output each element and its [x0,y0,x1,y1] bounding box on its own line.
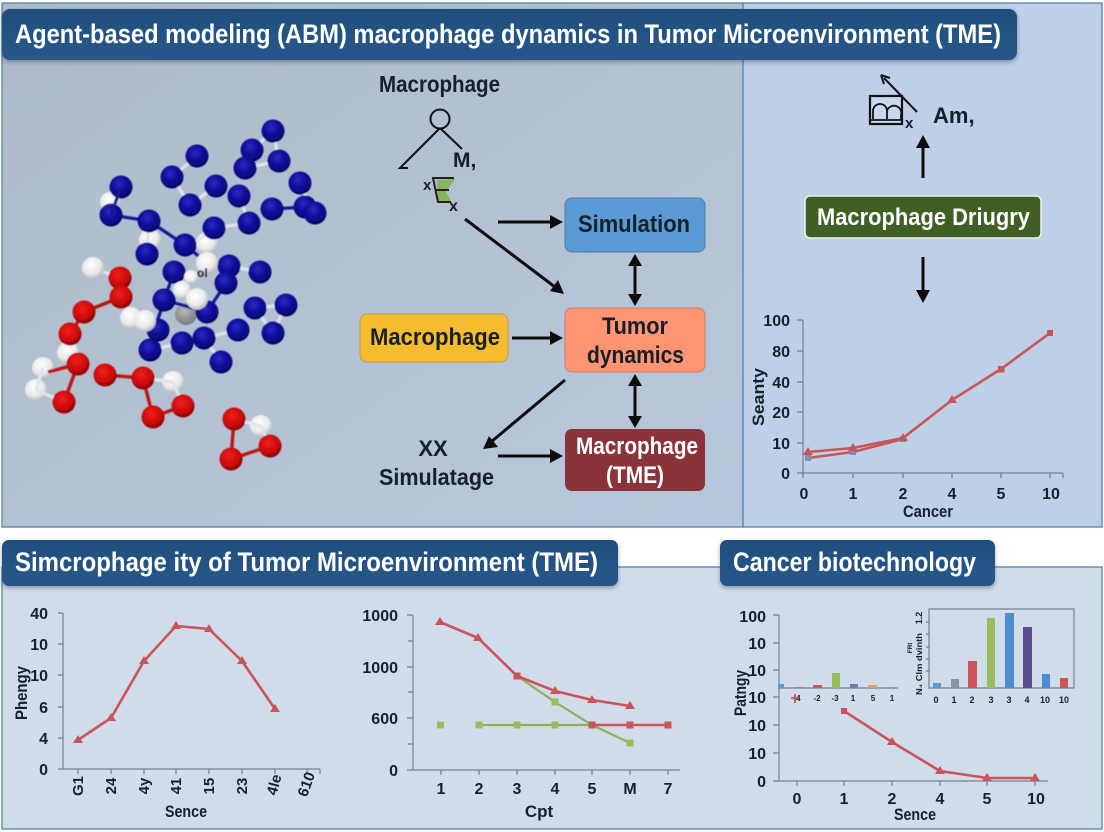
molecular model illustration [25,120,326,470]
line chart: seanty vs cancer: 10 [772,436,790,453]
panel: top right drug background [743,3,1102,527]
icon: drug target box with arrow [870,75,917,132]
box: tumor dynamics: Tumor [602,313,668,340]
inset bar chart: 3 [1006,695,1012,705]
line chart: phengy vs sence: 0 [39,762,48,779]
line chart: phengy vs sence: 6 [39,700,48,717]
line chart: multi-series vs cpt: 1000 [362,660,398,677]
small bar chart overlay: -4 [793,694,801,703]
line chart: seanty vs cancer: 0 [800,486,809,503]
line chart: phengy vs sence: 4y [136,777,153,794]
line chart: seanty vs cancer: 10 [1042,486,1060,503]
icon: macrophage agent figure: x [423,177,432,194]
line chart: seanty vs cancer: Cancer [903,502,953,521]
line chart: patngy vs sence: 10 [748,636,766,653]
box: simulation: Simulation [578,211,690,238]
line chart: seanty vs cancer: 80 [772,344,790,361]
line chart: phengy vs sence: 10 [30,637,48,654]
line chart: patngy vs sence: 0 [793,791,802,808]
small bar chart overlay: 5 [871,694,876,703]
line chart: phengy vs sence: G1 [70,776,87,796]
inset bar chart: 0 [933,695,939,705]
icon: macrophage agent figure: x [449,198,458,215]
box: macrophage drugery: Macrophage Driugry [817,204,1031,231]
box: tumor dynamics: dynamics [587,342,684,369]
line chart: multi-series vs cpt: 0 [389,763,398,780]
line chart: multi-series vs cpt: 4 [551,781,560,798]
line chart: multi-series vs cpt: 3 [513,781,522,798]
line chart: seanty vs cancer: 1 [849,486,858,503]
box: macrophage input [360,314,508,362]
macrophage label: Macrophage [379,71,500,97]
small bar chart overlay: -2 [813,694,821,703]
line chart: multi-series vs cpt: 600 [371,711,398,728]
line chart: patngy vs sence: 10 [748,690,766,707]
heading: cancer biotechnology: Cancer biotechnology [733,547,976,577]
line chart: phengy vs sence: Sence [165,802,207,821]
small bar chart overlay: -3 [831,694,839,703]
line chart: patngy vs sence: 0 [757,774,766,791]
inset bar chart: FRI [907,643,914,653]
panel: top left simulation background [2,3,743,527]
box: macrophage drugery [805,196,1041,238]
line chart: patngy vs sence: 10 [1027,791,1045,808]
line chart: multi-series vs cpt [362,608,680,821]
heading: simulation of tumor microenvironment: Simcrophage ity of Tumor Microenvironment (TME) [15,547,598,577]
line chart: patngy vs sence: 5 [983,791,992,808]
small bar chart overlay: 1 [890,694,895,703]
line chart: seanty vs cancer: 5 [997,486,1006,503]
line chart: patngy vs sence: Patngy [731,670,750,716]
box: macrophage TME: Macrophage [576,433,698,460]
line chart: seanty vs cancer: 4 [948,486,957,503]
line chart: seanty vs cancer: 20 [772,405,790,422]
line chart: phengy vs sence: 10 [30,668,48,685]
box: simulation [565,198,705,252]
small bar chart overlay: 1 [851,694,856,703]
inset bar chart: 3 [988,695,994,705]
line chart: patngy vs sence: 10 [748,718,766,735]
inset bar chart: 1 [951,695,957,705]
inset bar chart: 2 [969,695,975,705]
line chart: patngy vs sence: 10 [748,663,766,680]
heading: cancer biotechnology [720,540,995,586]
heading: simulation of tumor microenvironment [2,540,618,586]
line chart: phengy vs sence: 610 [295,770,319,799]
box: macrophage TME: (TME) [606,462,664,489]
arrow: down to chart [916,257,930,303]
small bar chart overlay [778,673,898,703]
panel: bottom analysis background [2,567,1102,829]
line chart: multi-series vs cpt: 5 [588,781,597,798]
line chart: seanty vs cancer: 0 [781,466,790,483]
line chart: patngy vs sence: 2 [888,791,897,808]
line chart: seanty vs cancer: Seanty [749,367,768,426]
line chart: multi-series vs cpt: 7 [664,781,673,798]
icon: macrophage agent figure: M, [453,149,476,172]
simulatage label [379,436,494,490]
line chart: phengy vs sence: 24 [103,777,120,794]
line chart: multi-series vs cpt: 1 [437,781,446,798]
simulatage label: Simulatage [379,464,494,490]
line chart: patngy vs sence: 1 [840,791,849,808]
line chart: multi-series vs cpt: Cpt [525,802,553,821]
inset bar chart: 10 [1040,695,1050,705]
line chart: phengy vs sence [12,606,320,821]
inset bar chart: 10 [1059,695,1069,705]
icon: macrophage agent figure [400,110,476,215]
line chart: phengy vs sence: 4le [264,773,286,797]
line chart: seanty vs cancer: 2 [899,486,908,503]
line chart: patngy vs sence: 100 [739,609,766,626]
inset bar chart: N₄ Clm dvinth [915,633,924,695]
line chart: seanty vs cancer [749,313,1063,521]
line chart: phengy vs sence: 40 [30,606,48,623]
box: macrophage input: Macrophage [370,324,500,351]
box: tumor dynamics [565,308,705,372]
icon: drug target box with arrow: x [905,115,914,132]
title banner [2,9,1017,60]
line chart: patngy vs sence: Sence [894,805,936,824]
line chart: phengy vs sence: 41 [168,778,185,794]
line chart: patngy vs sence: 4 [936,791,945,808]
line chart: phengy vs sence: 4 [39,731,48,748]
line chart: phengy vs sence: Phengy [12,666,31,720]
line chart: multi-series vs cpt: 1000 [362,608,398,625]
label: Am: Am, [933,103,975,128]
line chart: seanty vs cancer: 40 [772,375,790,392]
line chart: patngy vs sence: 10 [748,746,766,763]
line chart: seanty vs cancer: 100 [763,313,790,330]
line chart: multi-series vs cpt: M [623,781,637,798]
line chart: phengy vs sence: 15 [201,778,218,794]
inset bar chart: 1.2 [914,612,924,624]
inset bar chart [907,609,1074,705]
box: macrophage TME [565,429,705,491]
arrow: up to icon [916,135,930,178]
simulatage label: XX [418,436,448,461]
inset bar chart: 4 [1024,695,1030,705]
arrows: flow connectors [465,215,642,463]
line chart: patngy vs sence [731,609,1048,824]
line chart: phengy vs sence: 23 [234,778,251,794]
molecular model illustration: ol [197,266,208,280]
line chart: multi-series vs cpt: 2 [475,781,484,798]
